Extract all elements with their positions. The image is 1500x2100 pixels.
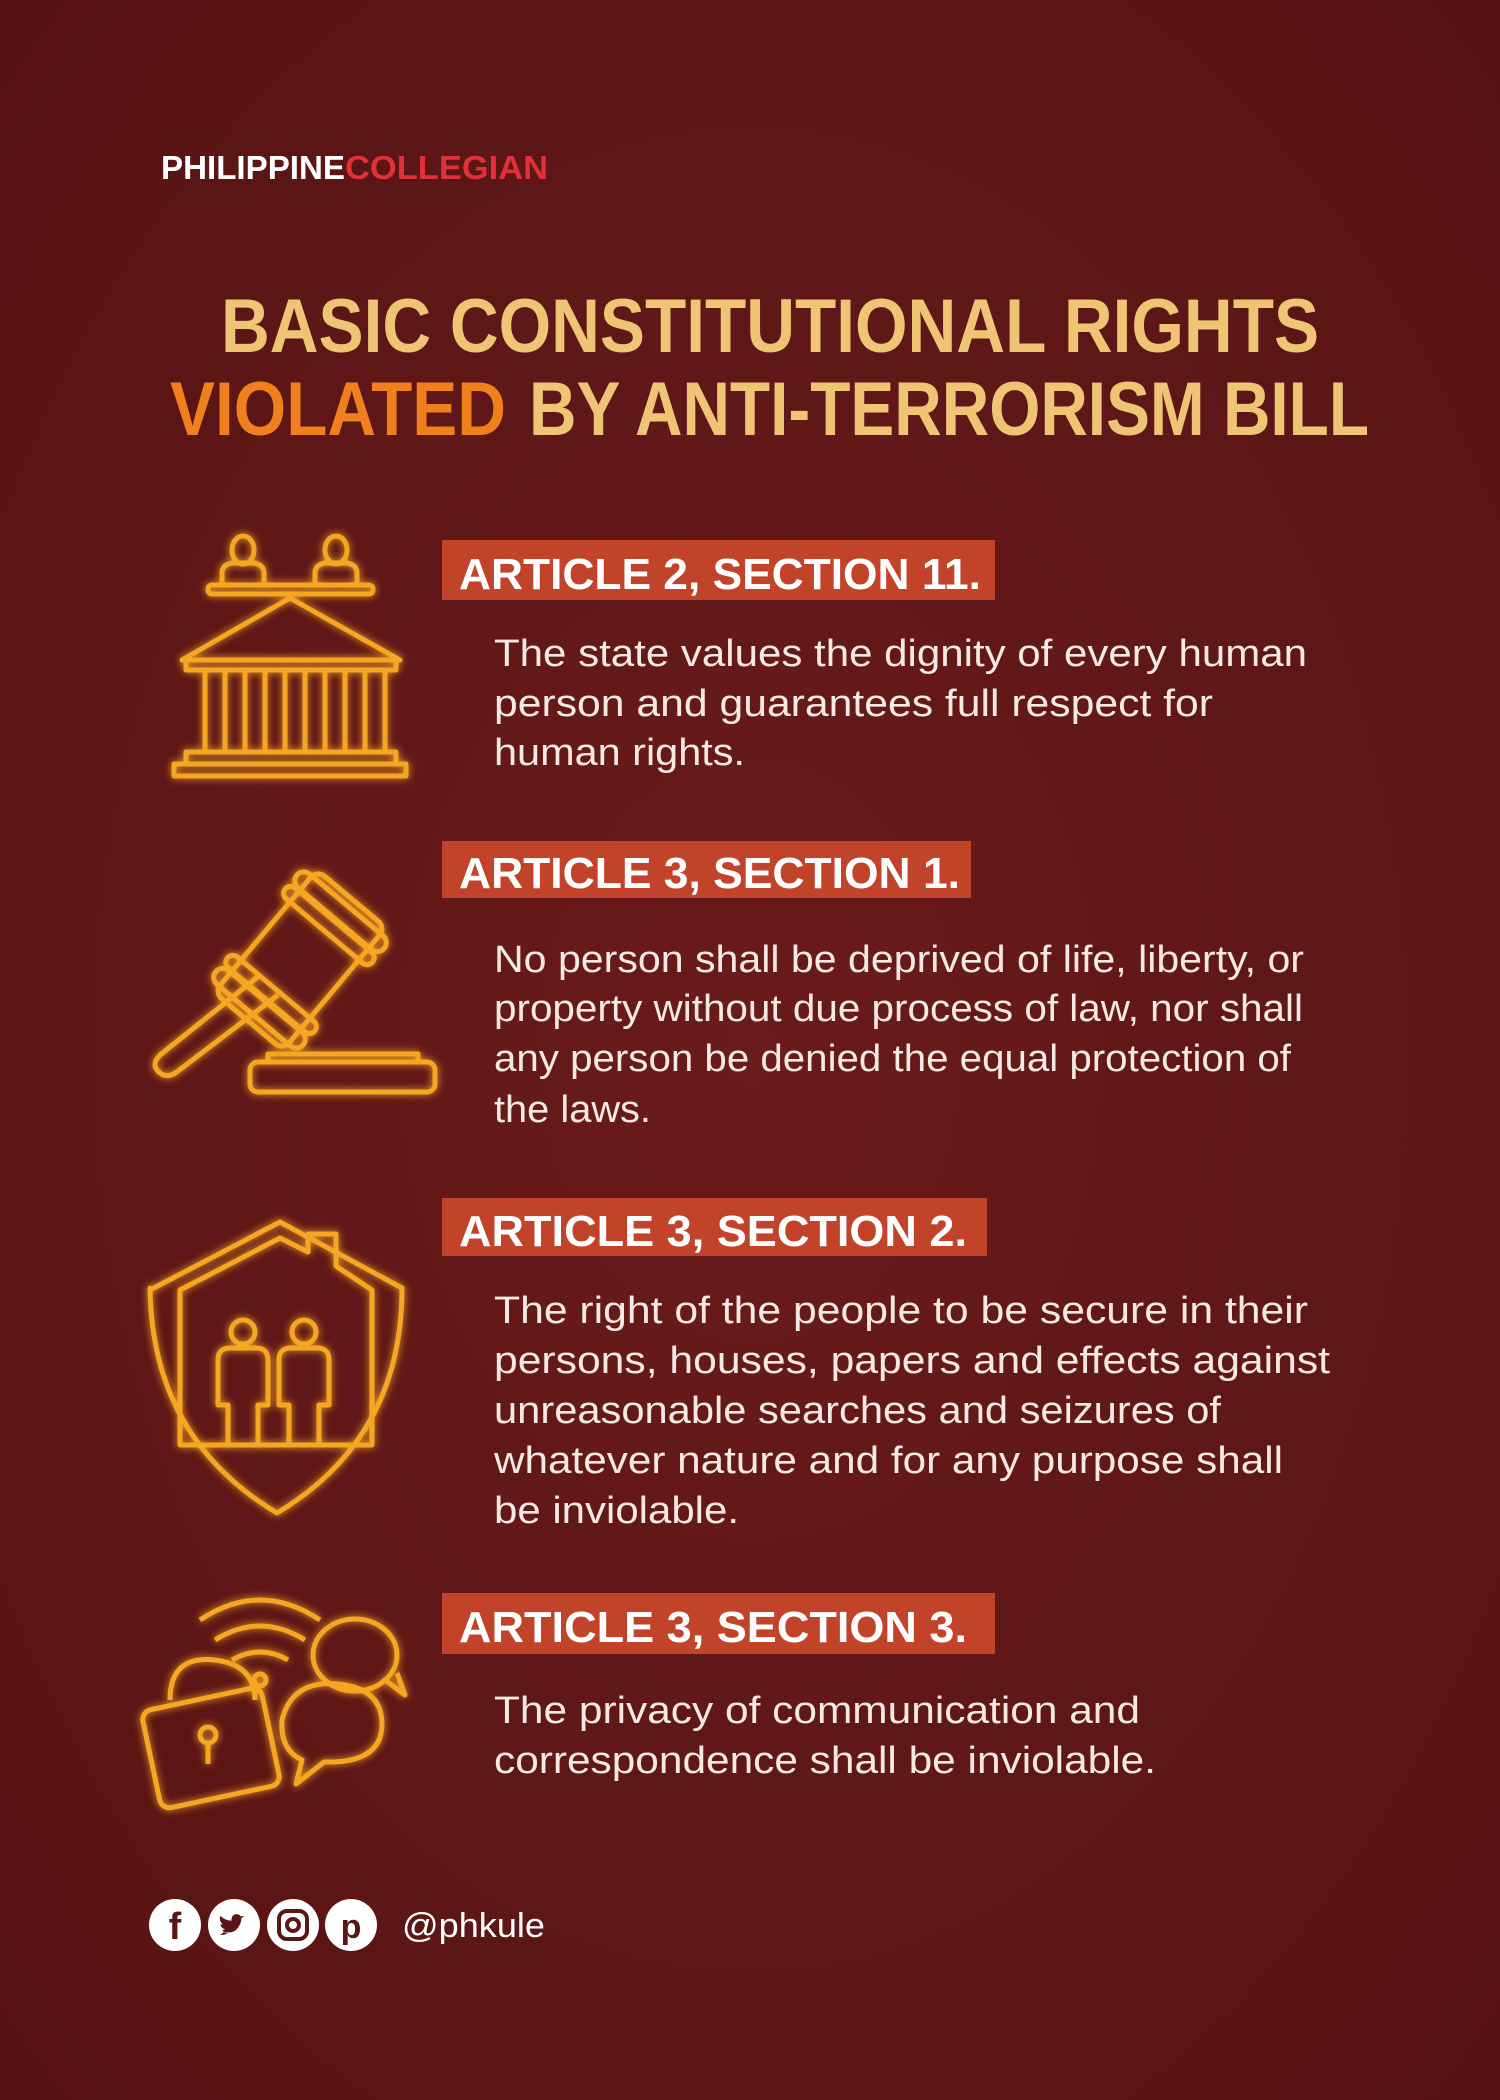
article 1: ARTICLE 2, SECTION 11. bbox=[459, 550, 981, 599]
article 4: ARTICLE 3, SECTION 3. bbox=[459, 1603, 967, 1652]
article 1 bbox=[442, 540, 1307, 774]
article 4 bbox=[442, 1593, 1156, 1782]
header logo: COLLEGIAN bbox=[345, 149, 548, 186]
article 1: person and guarantees full respect for bbox=[494, 683, 1213, 725]
article 1: human rights. bbox=[494, 732, 745, 774]
article 3 bbox=[442, 1198, 1330, 1532]
article 2: property without due process of law, nor shall bbox=[494, 988, 1303, 1030]
article 3: unreasonable searches and seizures of bbox=[494, 1390, 1221, 1432]
social footer: @phkule bbox=[402, 1907, 545, 1945]
social footer: p bbox=[341, 1908, 361, 1946]
article 3: be inviolable. bbox=[494, 1490, 739, 1532]
header logo: PHILIPPINE bbox=[161, 149, 345, 186]
icon: lock and chat bbox=[141, 1600, 405, 1810]
article 3: ARTICLE 3, SECTION 2. bbox=[459, 1207, 967, 1256]
social footer: f bbox=[169, 1906, 182, 1948]
title: VIOLATED bbox=[170, 367, 506, 452]
title: BY ANTI-TERRORISM BILL bbox=[529, 367, 1369, 452]
icon: courthouse bbox=[174, 536, 406, 776]
article 2: any person be denied the equal protection of bbox=[494, 1038, 1291, 1080]
article 4: correspondence shall be inviolable. bbox=[494, 1740, 1156, 1782]
social footer bbox=[149, 1899, 545, 1951]
article 1: The state values the dignity of every human bbox=[494, 633, 1307, 675]
article 3: whatever nature and for any purpose shall bbox=[493, 1440, 1283, 1482]
article 2: the laws. bbox=[494, 1089, 651, 1131]
article 4: The privacy of communication and bbox=[494, 1690, 1140, 1732]
article 3: persons, houses, papers and effects against bbox=[494, 1340, 1330, 1382]
article 2: ARTICLE 3, SECTION 1. bbox=[459, 849, 960, 898]
article 2 bbox=[442, 841, 1304, 1131]
title: BASIC CONSTITUTIONAL RIGHTS bbox=[221, 284, 1319, 369]
article 3: The right of the people to be secure in their bbox=[494, 1290, 1308, 1332]
title bbox=[170, 284, 1369, 452]
article 2: No person shall be deprived of life, liberty, or bbox=[494, 939, 1304, 981]
icon: shield house bbox=[150, 1222, 402, 1513]
icon: gavel bbox=[155, 862, 435, 1092]
header logo bbox=[161, 149, 548, 186]
